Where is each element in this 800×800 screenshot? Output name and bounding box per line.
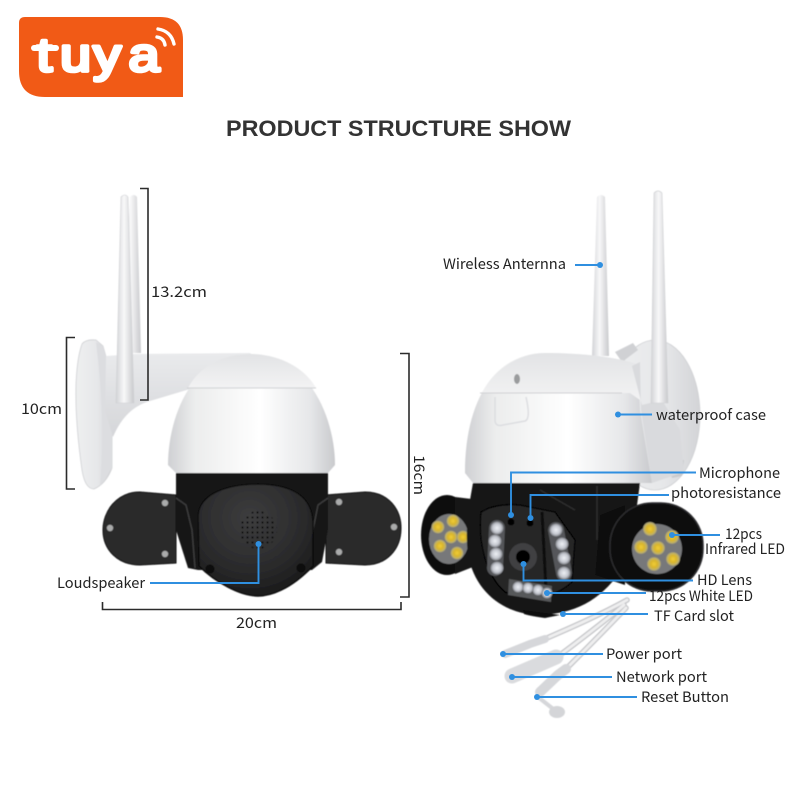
callout: infrared LED: 12pcs <box>725 523 762 544</box>
front antenna <box>651 191 668 403</box>
callout: infrared LED <box>669 523 785 559</box>
logo: tuya <box>19 17 183 97</box>
bottom LED bar <box>508 579 552 602</box>
title: PRODUCT STRUCTURE SHOW <box>226 116 571 141</box>
left floodlight <box>421 495 480 575</box>
dimension: 10cm: 10cm <box>21 398 62 419</box>
sensors <box>508 518 514 526</box>
plate screws <box>107 499 397 557</box>
dome <box>465 353 652 483</box>
callout: waterproof case: waterproof case <box>656 404 766 425</box>
rear antenna <box>592 195 609 356</box>
callout: power port: Power port <box>606 643 683 664</box>
TF card slot bump <box>523 610 560 618</box>
front antenna <box>116 195 134 403</box>
rear antenna <box>122 195 141 353</box>
logo: tuya: u <box>60 28 91 81</box>
dimension: 13.2cm: 13.2cm <box>151 281 207 302</box>
HD lens <box>509 543 537 571</box>
black ball <box>198 484 313 596</box>
callout: white LED <box>544 585 753 606</box>
right floodlight <box>595 503 703 591</box>
callout: microphone <box>508 462 780 518</box>
mount arm <box>105 353 262 437</box>
dome <box>168 354 335 473</box>
dimension: 16cm <box>400 354 430 597</box>
left floodlight back <box>103 492 176 565</box>
callout: power port <box>500 643 683 664</box>
black collar <box>176 473 328 570</box>
logo: tuya: y <box>93 28 121 81</box>
callout: network port <box>509 666 708 687</box>
callout: TF card slot: TF Card slot <box>654 605 735 626</box>
face panel <box>480 505 575 597</box>
callout: TF card slot <box>560 605 735 626</box>
dimension: 16cm: 16cm <box>409 455 430 495</box>
callout: white LED: 12pcs White LED <box>649 585 753 606</box>
callout: reset button: Reset Button <box>641 686 729 707</box>
dimension: 20cm: 20cm <box>236 612 277 633</box>
dimension: 13.2cm <box>140 188 207 400</box>
callout: loudspeaker <box>57 541 262 593</box>
cables <box>505 600 627 708</box>
logo: tuya: t <box>37 28 52 81</box>
callout: loudspeaker: Loudspeaker <box>57 572 145 593</box>
white LEDs <box>488 522 570 580</box>
callout: HD lens <box>520 561 752 590</box>
right floodlight back <box>326 492 401 565</box>
black body <box>467 483 640 615</box>
logo: tuya: a <box>129 28 160 81</box>
callout: reset button <box>534 686 729 707</box>
wall plate <box>76 340 112 489</box>
wall plate <box>610 340 700 490</box>
callout: microphone: Microphone <box>699 462 780 483</box>
camera: side view with dimensions <box>76 195 401 596</box>
callout: infrared LED: Infrared LED <box>705 538 785 559</box>
callout: network port: Network port <box>616 666 708 687</box>
callout: wireless antenna: Wireless Anternna <box>443 253 566 274</box>
callout: photoresistance: photoresistance <box>671 482 781 503</box>
dimension: 10cm <box>21 338 75 489</box>
callout: photoresistance <box>528 482 781 521</box>
camera: front view <box>421 191 703 718</box>
dimension: 20cm <box>102 602 401 633</box>
callout: HD lens: HD Lens <box>697 569 752 590</box>
speaker holes <box>239 511 277 549</box>
